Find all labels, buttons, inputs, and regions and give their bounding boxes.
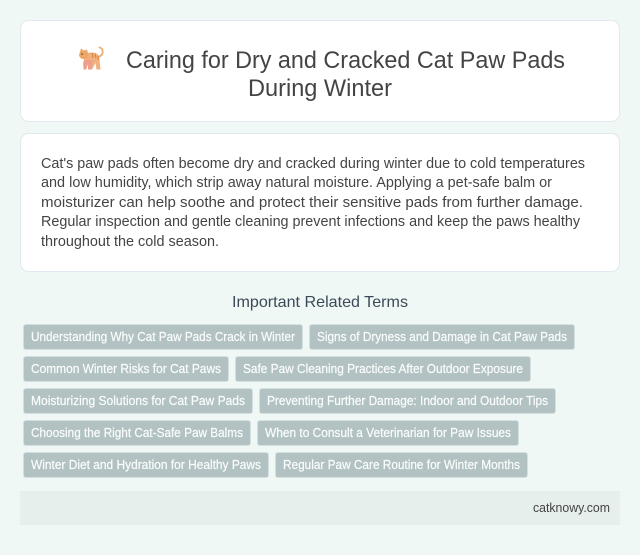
- tag: Preventing Further Damage: Indoor and Outdoor Tips: [267, 394, 548, 408]
- footer source: catknowy.com: [533, 500, 610, 515]
- tag: Safe Paw Cleaning Practices After Outdoor Exposure: [243, 362, 523, 376]
- tag: [258, 420, 518, 446]
- intro paragraph: [41, 156, 585, 250]
- panel: title card: [20, 20, 620, 122]
- tag: Choosing the Right Cat-Safe Paw Balms: [31, 426, 243, 440]
- tag: Regular Paw Care Routine for Winter Months: [283, 458, 520, 472]
- icon: cat: [79, 48, 103, 70]
- tag: [24, 420, 250, 446]
- intro paragraph: Regular inspection and gentle cleaning prevent infections and keep the paws healthy: [41, 214, 581, 230]
- tag: [24, 388, 252, 414]
- footer bar: [20, 491, 620, 525]
- tag: When to Consult a Veterinarian for Paw Issues: [265, 426, 511, 440]
- tag: Moisturizing Solutions for Cat Paw Pads: [31, 394, 245, 408]
- panel: intro text card: [20, 134, 620, 272]
- tag: [24, 356, 228, 382]
- tag: Understanding Why Cat Paw Pads Crack in Winter: [31, 330, 295, 344]
- intro paragraph: throughout the cold season.: [41, 234, 219, 250]
- tag: [236, 356, 530, 382]
- tag: [260, 388, 556, 414]
- title: [126, 47, 565, 102]
- tag: Winter Diet and Hydration for Healthy Paws: [31, 458, 261, 472]
- tag: [24, 452, 268, 478]
- tag: [276, 452, 528, 478]
- heading: important related terms: Important Related Terms: [232, 294, 408, 311]
- title: Caring for Dry and Cracked Cat Paw Pads: [126, 47, 565, 74]
- intro paragraph: and low humidity, which strip away natural moisture. Applying a pet-safe balm or: [41, 175, 552, 191]
- intro paragraph: moisturizer can help soothe and protect their sensitive pads from further damage.: [41, 195, 583, 211]
- tag list: [24, 324, 574, 478]
- tag: Signs of Dryness and Damage in Cat Paw Pads: [317, 330, 567, 344]
- tag: Common Winter Risks for Cat Paws: [31, 362, 221, 376]
- tag: [24, 324, 302, 350]
- intro paragraph: Cat's paw pads often become dry and cracked during winter due to cold temperatures: [41, 156, 585, 172]
- tag: [310, 324, 574, 350]
- title: During Winter: [248, 75, 392, 102]
